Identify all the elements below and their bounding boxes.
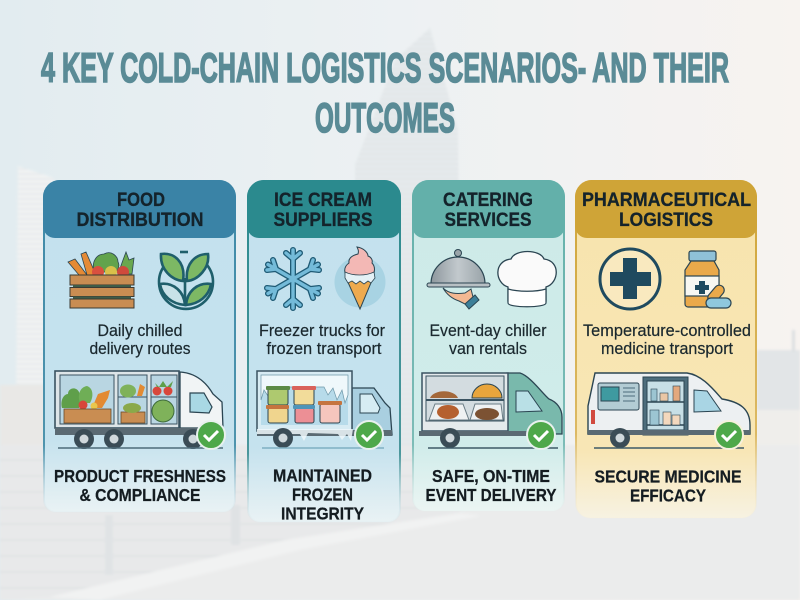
- icon: check badge: [715, 421, 743, 449]
- outcome text: pharma: SECURE MEDICINE: [594, 466, 742, 486]
- icon: check badge: [355, 421, 383, 449]
- heading: pharma: PHARMACEUTICAL: [582, 189, 751, 211]
- icon: pill bottle: [685, 251, 731, 308]
- heading: ice cream: SUPPLIERS: [274, 209, 372, 231]
- text: catering service: Event-day chiller: [430, 322, 547, 340]
- panel: catering services: [412, 180, 565, 511]
- card background: pharma: [576, 181, 756, 518]
- title: [41, 44, 729, 141]
- outcome text: ice cream: [273, 466, 372, 524]
- heading: catering: CATERING: [443, 189, 533, 211]
- outcome text: ice cream: INTEGRITY: [281, 504, 364, 524]
- card background: ice cream: [248, 181, 400, 522]
- panel: ice cream suppliers: [247, 180, 401, 524]
- text: food service: Daily chilled: [98, 322, 182, 340]
- heading: catering: SERVICES: [444, 209, 532, 231]
- icon: serving cloche: [427, 250, 490, 309]
- icon: freezer truck: [257, 371, 392, 449]
- icon: snowflake: [267, 250, 319, 308]
- heading: ice cream: ICE CREAM: [274, 189, 372, 211]
- outcome text: catering: EVENT DELIVERY: [426, 485, 557, 505]
- heading: ice cream: [247, 180, 401, 238]
- text: ice cream service: [259, 322, 385, 358]
- heading: catering: [412, 180, 565, 238]
- text: pharma service: [583, 322, 751, 358]
- icon: check badge: [197, 421, 225, 449]
- icon: vegetable crate: [68, 252, 134, 308]
- text: pharma service: medicine transport: [601, 340, 733, 358]
- title: OUTCOMES: [315, 94, 455, 141]
- outcome text: ice cream: MAINTAINED: [273, 466, 372, 486]
- text: catering service: van rentals: [449, 340, 527, 358]
- heading: pharma: [575, 180, 757, 238]
- outcome text: catering: [426, 466, 557, 505]
- text: ice cream service: Freezer trucks for: [259, 322, 385, 340]
- icon: chilled truck: [55, 371, 225, 449]
- outcome text: food: [54, 466, 226, 505]
- text: food service: [90, 322, 190, 358]
- heading: pharma: LOGISTICS: [619, 209, 713, 231]
- outcome text: food: PRODUCT FRESHNESS: [54, 466, 226, 486]
- icon: ice cream cone: [334, 247, 386, 309]
- outcome text: ice cream: FROZEN: [292, 484, 353, 504]
- outcome text: catering: SAFE, ON-TIME: [432, 466, 550, 486]
- icon: check badge: [527, 421, 555, 449]
- card background: food distribution: [44, 181, 235, 512]
- text: catering service: [430, 322, 547, 358]
- heading: food distribution: FOOD: [117, 189, 165, 211]
- card background: catering: [413, 181, 564, 511]
- outcome text: pharma: EFFICACY: [630, 486, 706, 506]
- outcome text: food: & COMPLIANCE: [80, 485, 200, 505]
- icon: medicine van: [588, 373, 750, 449]
- outcome text: pharma: [594, 466, 742, 506]
- text: food service: delivery routes: [90, 340, 190, 358]
- panel: food distribution: [43, 180, 236, 512]
- heading: food distribution: DISTRIBUTION: [76, 209, 204, 231]
- heading: food distribution: [43, 180, 236, 238]
- text: pharma service: Temperature-controlled: [583, 322, 751, 340]
- panel: pharmaceutical logistics: [575, 180, 757, 518]
- text: ice cream service: frozen transport: [266, 340, 382, 358]
- icon: chef hat: [498, 252, 556, 307]
- icon: medical cross: [600, 249, 660, 309]
- icon: leaf sprout: [159, 252, 213, 309]
- icon: chiller van: [419, 373, 562, 449]
